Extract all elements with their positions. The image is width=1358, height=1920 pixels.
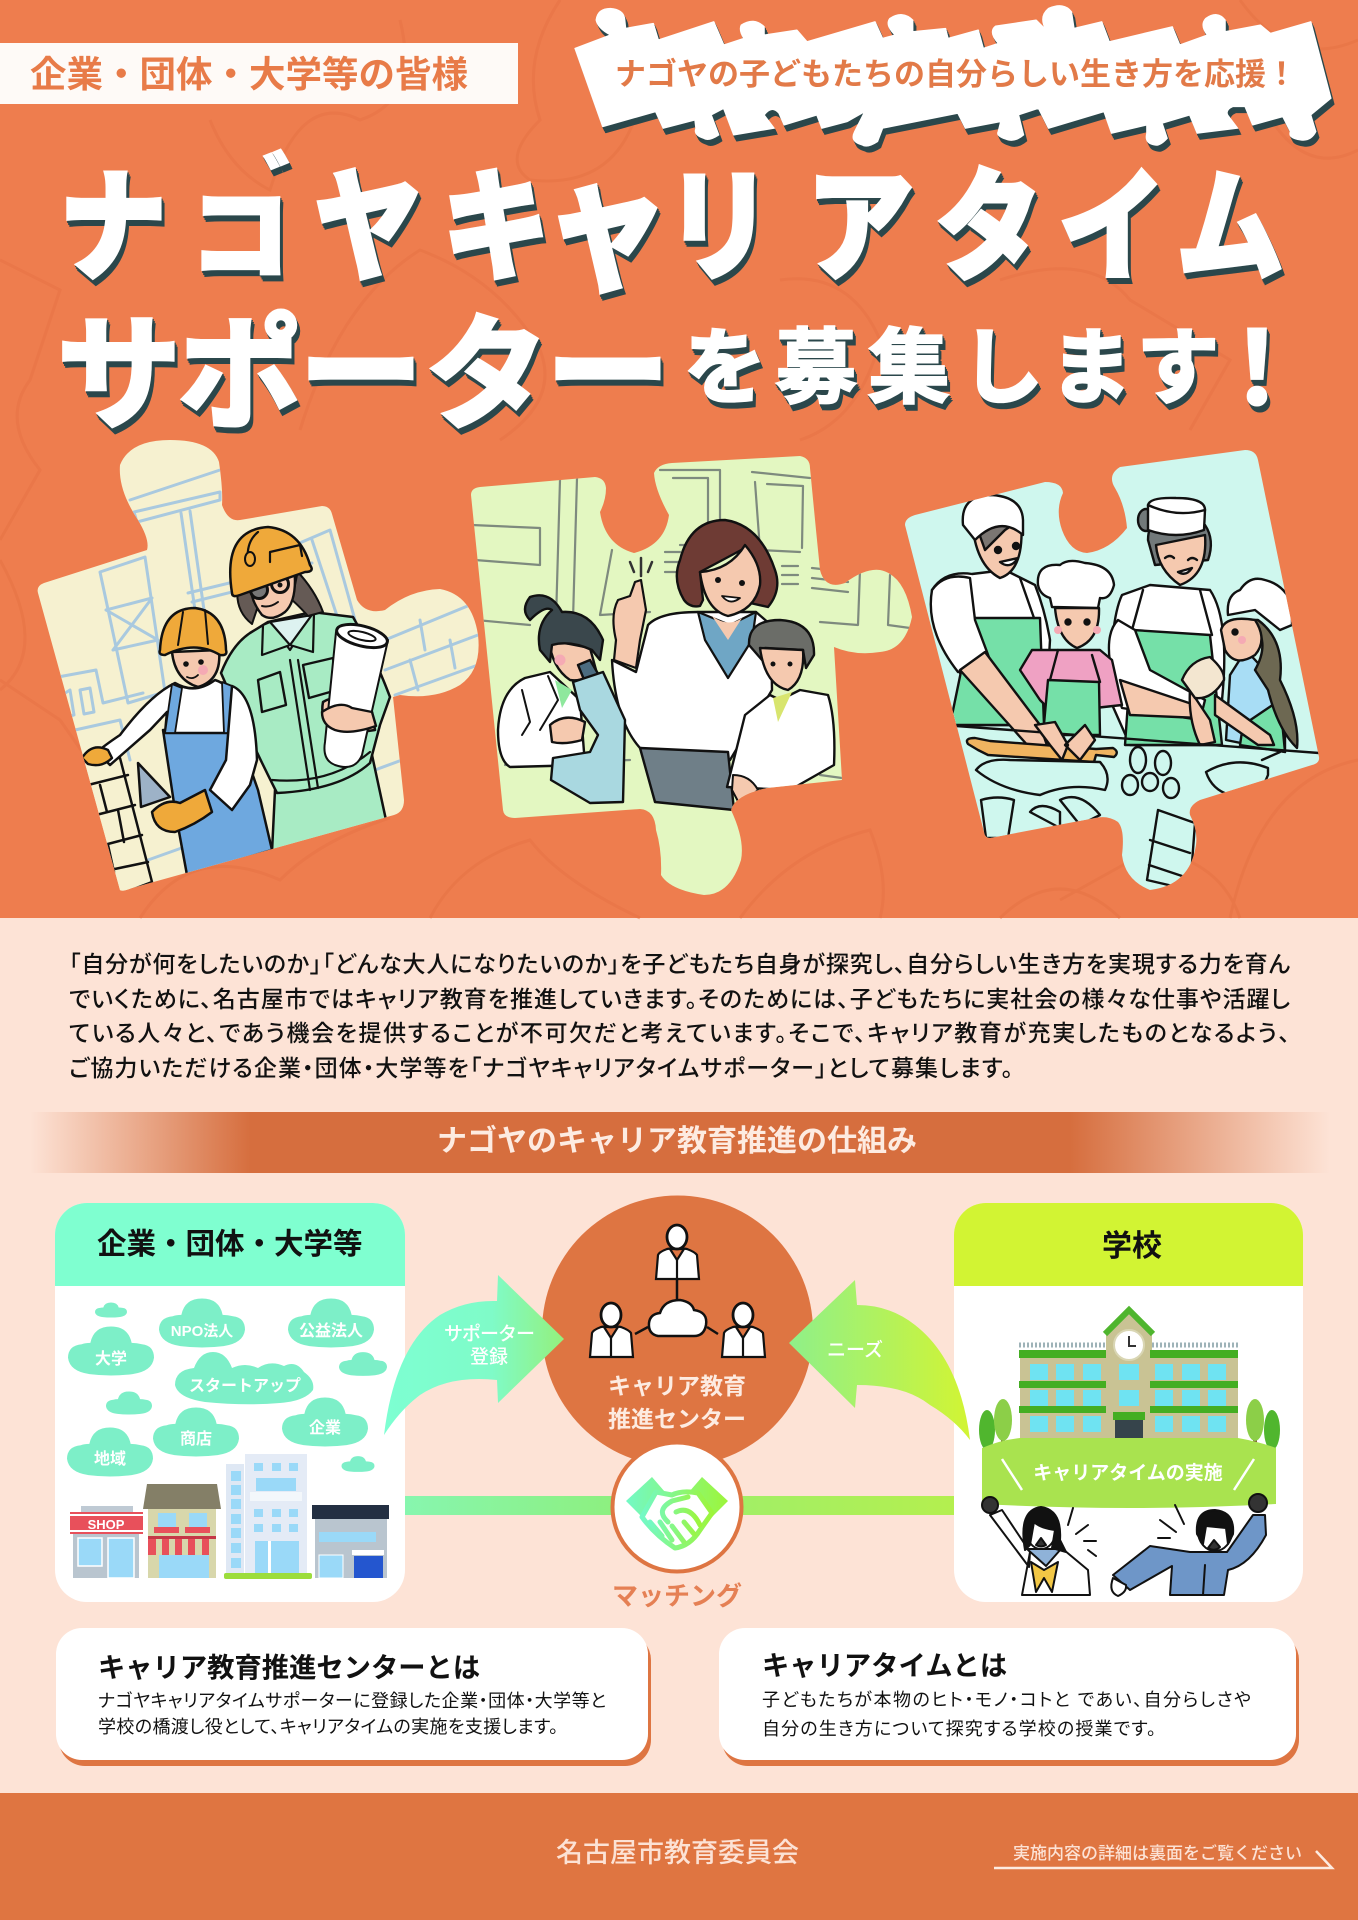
banner: career time implementation: キャリアタイムの実施	[1033, 1462, 1223, 1484]
intro paragraph: ご協力いただける企業・団体・大学等を「ナゴヤキャリアタイムサポーター」として募集します。	[69, 1055, 1013, 1081]
center circle: career education promotion center	[542, 1196, 813, 1466]
illustration: cooking puzzle piece	[905, 450, 1319, 890]
section heading bar	[30, 1112, 1330, 1173]
main title: コ	[190, 180, 290, 292]
info card: career education promotion center: キャリア教育推進センターとは	[98, 1652, 480, 1683]
cloud labels: NPO法人	[171, 1322, 233, 1340]
cloud labels: 企業	[309, 1418, 341, 1437]
intro paragraph	[69, 951, 1290, 1081]
main title: キ	[443, 161, 549, 295]
info card: career education promotion center	[56, 1628, 648, 1760]
arrow label: supporter registration: サポーター	[444, 1323, 534, 1345]
arrow: needs	[789, 1280, 970, 1440]
clouds: organisation types	[67, 1299, 387, 1476]
matching label: マッチング	[612, 1581, 742, 1611]
footer note with arrow: 実施内容の詳細は裏面をご覧ください	[1013, 1844, 1302, 1863]
illustration: science puzzle piece	[471, 456, 912, 895]
cloud labels: 地域	[94, 1450, 126, 1468]
main title: す	[1137, 323, 1219, 414]
main title	[57, 148, 1307, 445]
cloud labels: 大学	[95, 1349, 127, 1368]
banner: career time implementation	[982, 1438, 1276, 1508]
main title: を	[684, 323, 766, 414]
intro paragraph: ている人々と、であう機会を提供することが不可欠だと考えています。そこで、キャリア教育が充実したものとなるよう、	[69, 1020, 1290, 1046]
arrow label: supporter registration: 登録	[470, 1346, 508, 1368]
section heading bar: ナゴヤのキャリア教育推進の仕組み	[437, 1125, 917, 1158]
arrow label: supporter registration	[444, 1323, 534, 1368]
center circle: career education promotion center: キャリア教育	[608, 1373, 746, 1399]
main title: ヤ	[315, 161, 421, 295]
panel: school: 学校	[1102, 1230, 1162, 1263]
footer note with arrow	[994, 1844, 1335, 1870]
info card: career education promotion center: ナゴヤキャリアタイムサポーターに登録した企業・団体・大学等と	[98, 1691, 606, 1711]
main title: 募	[775, 323, 857, 414]
main title: ー	[299, 305, 423, 443]
arrow label: needs: ニーズ	[827, 1338, 883, 1361]
info card: career time: 自分の生き方について探究する学校の授業です。	[762, 1719, 1156, 1739]
main title: ！	[1207, 314, 1307, 426]
panel: companies	[55, 1203, 405, 1602]
top puzzle banner	[575, 6, 1331, 146]
main title: リ	[666, 161, 772, 295]
panel: school	[954, 1203, 1303, 1602]
main title: ゛	[264, 148, 336, 228]
footer background	[0, 1793, 1358, 1920]
intro paragraph: 「自分が何をしたいのか」「どんな大人になりたいのか」を子どもたち自身が探究し、自分らしい生き方を実現する力を育ん	[69, 951, 1290, 977]
illustration: construction puzzle piece	[38, 440, 1320, 895]
main title: ま	[1050, 323, 1132, 414]
top-left audience label	[0, 43, 518, 104]
panel: companies: 企業・団体・大学等	[97, 1228, 363, 1261]
illustration: town buildings: SHOP	[88, 1517, 125, 1532]
main title: サ	[57, 307, 181, 445]
main title: ア	[807, 161, 913, 295]
main title: ポ	[178, 307, 302, 445]
info card: career education promotion center: 学校の橋渡し役として、キャリアタイムの実施を支援します。	[98, 1717, 558, 1737]
main title: ム	[1177, 161, 1283, 295]
top-left audience label: 企業・団体・大学等の皆様	[30, 54, 468, 95]
info card: career time: キャリアタイムとは	[762, 1650, 1007, 1681]
main title: ャ	[545, 149, 669, 306]
illustration: students cheering	[982, 1494, 1267, 1596]
main title: イ	[1059, 161, 1165, 295]
cloud labels: 商店	[180, 1430, 212, 1448]
cloud labels: スタートアップ	[189, 1377, 301, 1395]
header background	[0, 0, 1358, 918]
info card: career time	[719, 1628, 1296, 1760]
main title: ナ	[60, 161, 166, 295]
arrow: supporter registration	[384, 1275, 564, 1435]
cloud labels	[94, 1321, 363, 1468]
info card: career time: 子どもたちが本物のヒト・モノ・コトと であい、自分らしさや	[762, 1690, 1251, 1710]
illustration: town buildings	[70, 1454, 389, 1579]
header puzzle pattern	[0, 0, 1358, 918]
center circle: career education promotion center: 推進センター	[608, 1406, 746, 1432]
matching circle with handshake icon	[612, 1442, 742, 1572]
illustration: school building	[979, 1308, 1280, 1455]
main title: タ	[936, 161, 1042, 295]
intro paragraph: でいくために、名古屋市ではキャリア教育を推進していきます。そのためには、子どもたちに実社会の様々な仕事や活躍し	[69, 986, 1290, 1012]
main title: 集	[868, 323, 950, 414]
banner slogan: ナゴヤの子どもたちの自分らしい生き方を応援！	[615, 57, 1297, 92]
main title: ー	[546, 305, 670, 443]
footer issuer: 名古屋市教育委員会	[556, 1838, 799, 1868]
main title: タ	[425, 307, 549, 445]
main title: し	[961, 323, 1043, 414]
cloud labels: 公益法人	[299, 1321, 363, 1340]
